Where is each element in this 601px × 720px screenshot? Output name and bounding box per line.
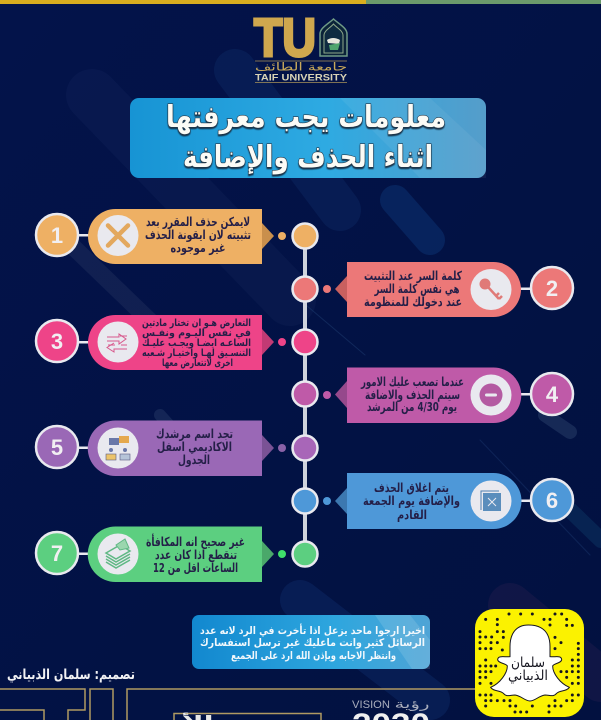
snapcode name: [508, 655, 548, 684]
logo: Taif University: [254, 8, 348, 84]
text 5: الجدول: [178, 452, 210, 467]
item 2: 2: [546, 276, 558, 301]
snapcode: [475, 609, 584, 717]
title text: اثناء الحذف والإضافة: [183, 140, 433, 175]
text 2: [364, 268, 463, 309]
item 7: [36, 526, 286, 582]
text 7: الساعات اقل من 12: [153, 560, 238, 575]
item 7: 7: [51, 541, 63, 566]
item 1: 1: [51, 223, 63, 248]
logo: Taif University: TAIF UNIVERSITY: [255, 72, 348, 84]
icon: advisors chat: [98, 428, 138, 468]
text 6: [363, 480, 460, 523]
item 1: [36, 209, 286, 264]
text 2: هي نفس كلمة السر: [374, 281, 460, 296]
icon: close window: [470, 480, 512, 522]
timeline: [292, 224, 318, 566]
icon: conflicting arrows: [98, 322, 138, 362]
item 5: 5: [51, 435, 63, 460]
top color bar: [0, 0, 601, 4]
text 1: [145, 214, 251, 255]
decorative diagonal bands: [66, 70, 601, 700]
text 5: تجد اسم مرشدك: [156, 426, 233, 441]
designer credit: تصميم: سلمان الذبياني: [7, 667, 135, 683]
text 3: الساعـه ايضـا ويجـب عليـك: [142, 338, 251, 349]
text 4: سيتم الحذف والاضافة: [365, 387, 460, 402]
closing note panel: [192, 615, 430, 669]
text 4: عندما تصعب عليك الامور: [360, 374, 464, 389]
gold frame lines: [0, 689, 476, 720]
text 3: في نفس اليـوم ونفـس: [142, 328, 251, 339]
text 5: الاكاديمي اسفل: [157, 439, 232, 454]
closing note panel: وانتظر الاجابه وبإذن الله ارد على الجميع: [231, 650, 396, 662]
item 6: 6: [546, 488, 558, 513]
icon: money stack: [98, 534, 138, 574]
item 6: [323, 473, 573, 529]
title panel: [130, 98, 486, 178]
text 2: كلمة السر عند التثبيت: [364, 268, 463, 283]
snapcode dots: [480, 614, 578, 712]
icon: minus: [470, 374, 512, 416]
closing note panel: اخيرا ارجوا ماحد يزعل اذا تأخرت في الرد لانه عدد: [200, 623, 425, 637]
text 7: [146, 533, 245, 575]
title text: معلومات يجب معرفتها: [166, 100, 446, 135]
item 3: [36, 315, 286, 370]
vision 2030 logo: [352, 697, 430, 720]
text 1: تثبيته لان ايقونة الحذف: [145, 227, 251, 242]
text 7: تنقطع اذا كان عدد: [155, 547, 237, 562]
text 6: القادم: [397, 507, 427, 523]
snapcode name: الذبياني: [508, 668, 548, 684]
text 2: عند دخولك للمنظومة: [364, 294, 462, 309]
item 4: [323, 368, 573, 423]
ghost: [491, 625, 569, 701]
text 4: يوم 4/30 من المرشد: [367, 399, 457, 415]
logo: Taif University: جامعة الطائف: [255, 60, 347, 74]
text 3: [142, 318, 251, 369]
logo: Taif University: TU: [254, 8, 316, 68]
snapcode name: سلمان: [511, 655, 545, 671]
item 4: 4: [546, 382, 559, 407]
text 7: غير صحيح انه المكافأة: [146, 533, 245, 549]
title text: [166, 100, 446, 175]
closing note panel: الرسائل كثير وانت ماعليك غير ترسل استفسارك: [200, 637, 425, 649]
icon: delete cross: [98, 215, 138, 256]
vision 2030 logo: رؤية: [394, 697, 430, 712]
vision 2030 logo: VISION: [352, 699, 390, 711]
text 3: التعارض هـو ان تختار مادتين: [142, 318, 251, 329]
text 4: [360, 374, 464, 415]
icon: key: [470, 269, 512, 310]
item 3: 3: [51, 329, 63, 354]
text 3: اخرى لاتتعارض معها: [162, 358, 233, 369]
text 1: غير موجوده: [170, 240, 226, 255]
text 5: [156, 426, 233, 467]
item 2: [323, 262, 573, 317]
text 6: يتم اغلاق الحذف: [374, 480, 449, 495]
item 5: [36, 420, 286, 476]
text 1: لايمكن حذف المقرر بعد: [146, 214, 250, 229]
text 3: التنسـيق لهـا واختيـار شـعبه: [142, 348, 251, 359]
text 6: والإضافة يوم الجمعة: [363, 493, 460, 509]
